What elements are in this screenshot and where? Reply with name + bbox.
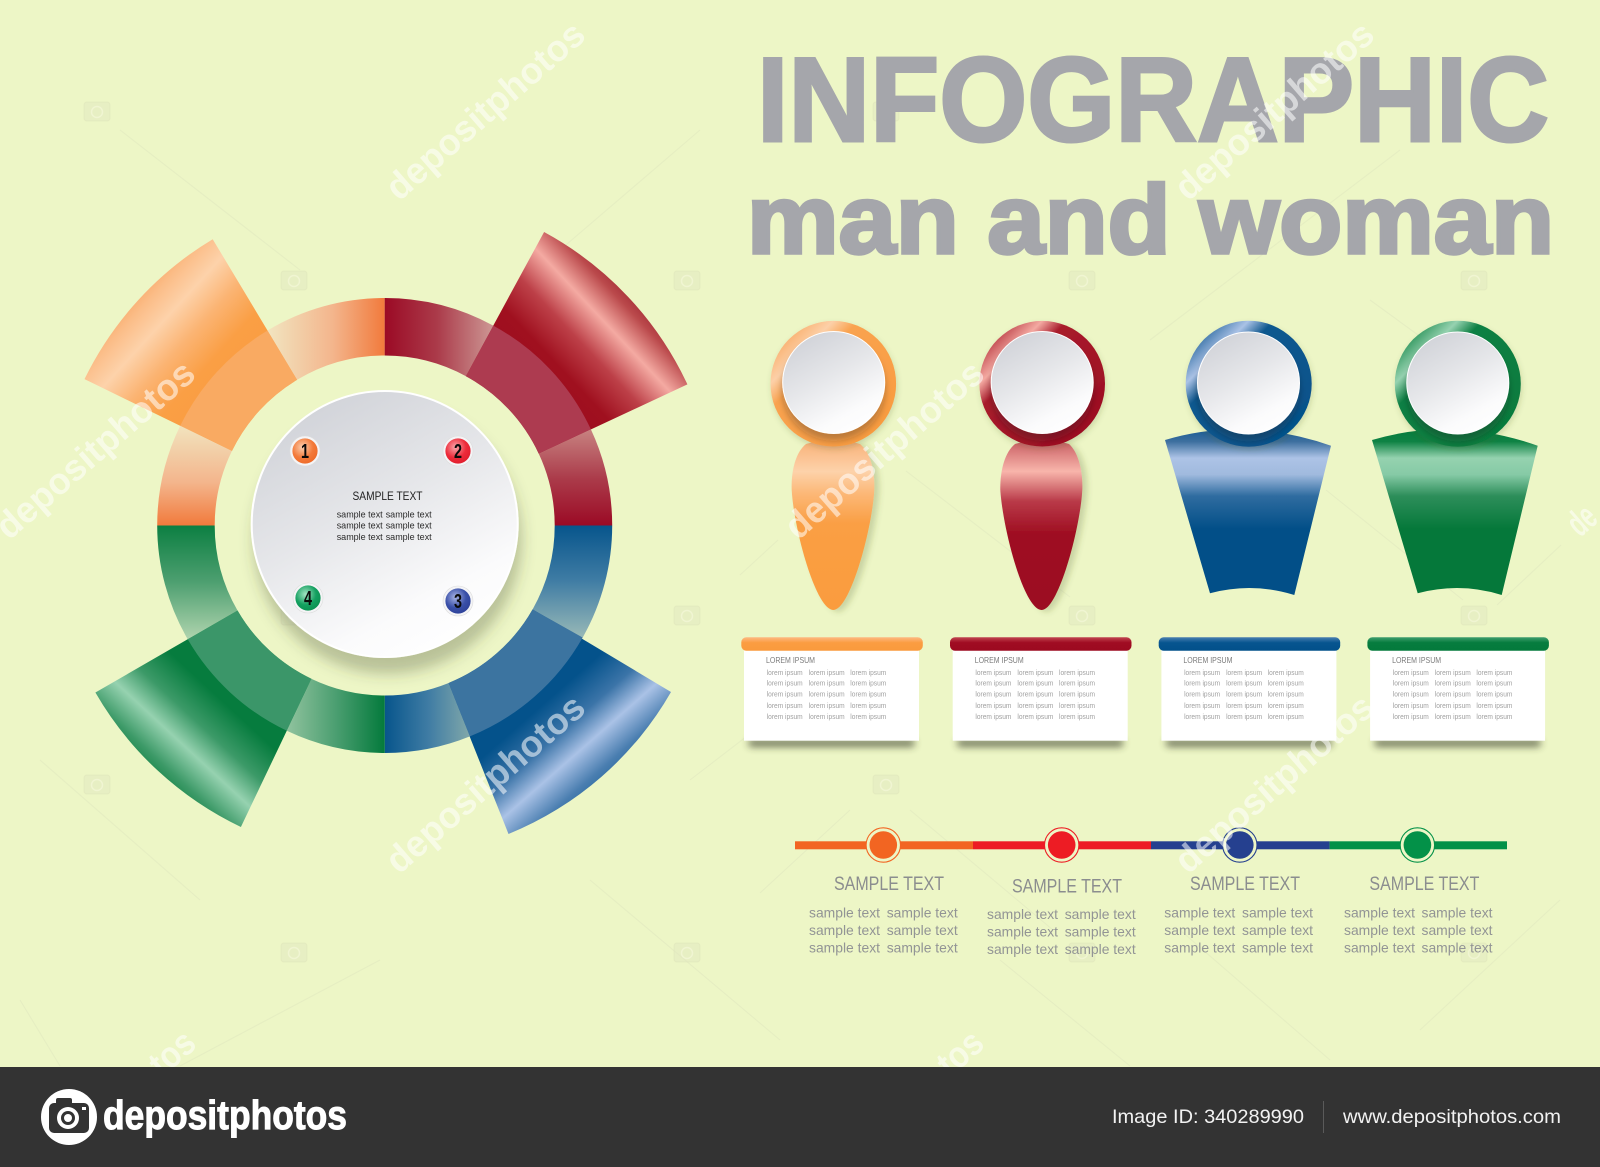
card: blue: LOREM IPSUM bbox=[1183, 656, 1233, 665]
watermark camera icons bbox=[84, 102, 1487, 962]
timeline text 3 bbox=[1164, 874, 1313, 955]
card: red bbox=[950, 637, 1132, 747]
timeline text 1: sample text bbox=[809, 939, 880, 955]
card: green: lorem ipsum bbox=[1435, 690, 1471, 698]
card: green: lorem ipsum bbox=[1435, 712, 1471, 721]
card: red: lorem ipsum bbox=[1017, 690, 1053, 698]
card: orange: LOREM IPSUM bbox=[766, 656, 815, 665]
title line 2: man and woman bbox=[747, 165, 1554, 274]
card: green: lorem ipsum bbox=[1393, 668, 1429, 677]
card: green: lorem ipsum bbox=[1476, 668, 1512, 677]
card: blue: lorem ipsum bbox=[1184, 690, 1220, 698]
sector: orange bbox=[84, 239, 297, 451]
ring: red quadrant bbox=[385, 298, 612, 526]
card: green: lorem ipsum bbox=[1393, 712, 1429, 721]
timeline text 4 bbox=[1344, 874, 1493, 955]
card: green: lorem ipsum bbox=[1435, 678, 1471, 688]
card: orange: lorem ipsum bbox=[809, 712, 845, 721]
card: orange: lorem ipsum bbox=[809, 678, 845, 688]
card: red: lorem ipsum bbox=[975, 712, 1011, 721]
badge 1 bbox=[290, 436, 320, 466]
timeline text 1: SAMPLE TEXT bbox=[834, 874, 944, 895]
radial diagram bbox=[84, 232, 687, 834]
card: orange bbox=[741, 637, 923, 747]
card: blue: lorem ipsum bbox=[1184, 678, 1220, 688]
sector: red bbox=[466, 232, 687, 454]
timeline bbox=[795, 828, 1507, 862]
card: blue: lorem ipsum bbox=[1226, 678, 1262, 688]
head ring bbox=[1186, 321, 1312, 447]
card: red: lorem ipsum bbox=[975, 668, 1011, 677]
centre text: sample text bbox=[386, 532, 432, 543]
card: orange: lorem ipsum bbox=[767, 668, 803, 677]
timeline text 1: sample text bbox=[887, 939, 958, 955]
card: red: lorem ipsum bbox=[1059, 701, 1095, 710]
head disc bbox=[1407, 332, 1509, 434]
watermark text: depositphotos bbox=[377, 13, 593, 208]
card: red: lorem ipsum bbox=[1017, 678, 1053, 688]
footer logo: depositphotos bbox=[103, 1092, 347, 1138]
card: red: lorem ipsum bbox=[1059, 678, 1095, 688]
node 3 bbox=[1223, 828, 1257, 862]
watermark text: tos bbox=[928, 1022, 991, 1084]
centre text: sample text bbox=[386, 509, 432, 520]
timeline text 1 bbox=[809, 874, 958, 955]
timeline text 4: sample text bbox=[1344, 904, 1415, 920]
timeline text 2: SAMPLE TEXT bbox=[1012, 876, 1122, 897]
figure: orange bbox=[770, 321, 896, 610]
badge 4 bbox=[293, 583, 323, 613]
badge 2 bbox=[443, 436, 473, 466]
watermark lines bbox=[20, 130, 1561, 1066]
card: blue: lorem ipsum bbox=[1184, 668, 1220, 677]
timeline text 2: sample text bbox=[1065, 941, 1136, 957]
card: blue: lorem ipsum bbox=[1226, 690, 1262, 698]
timeline text 2: sample text bbox=[1065, 906, 1136, 922]
card: blue: lorem ipsum bbox=[1268, 668, 1304, 677]
card: orange: lorem ipsum bbox=[850, 678, 886, 688]
timeline text 2: sample text bbox=[1065, 924, 1136, 940]
card: blue: lorem ipsum bbox=[1184, 701, 1220, 710]
watermark text: tos bbox=[140, 1022, 203, 1084]
card: blue bbox=[1159, 637, 1340, 747]
timeline text 1: sample text bbox=[887, 922, 958, 938]
card: orange: lorem ipsum bbox=[850, 668, 886, 677]
timeline text 3: sample text bbox=[1164, 904, 1235, 920]
card: red: lorem ipsum bbox=[1059, 690, 1095, 698]
timeline text 3: SAMPLE TEXT bbox=[1190, 874, 1300, 895]
card: red: lorem ipsum bbox=[1017, 712, 1053, 721]
ring: blue quadrant bbox=[385, 526, 612, 753]
card: green: lorem ipsum bbox=[1393, 678, 1429, 688]
timeline text 2: sample text bbox=[987, 941, 1058, 957]
timeline text 2: sample text bbox=[987, 906, 1058, 922]
head disc bbox=[991, 332, 1093, 434]
timeline text 2: sample text bbox=[987, 924, 1058, 940]
card: orange: lorem ipsum bbox=[767, 701, 803, 710]
timeline text 3: sample text bbox=[1242, 922, 1313, 938]
centre text: sample text bbox=[337, 509, 383, 520]
watermark text: depositphotos bbox=[377, 686, 593, 881]
card: orange: lorem ipsum bbox=[850, 690, 886, 698]
badge 4: 4 bbox=[304, 588, 313, 610]
timeline text 3: sample text bbox=[1242, 904, 1313, 920]
timeline text 4: sample text bbox=[1344, 939, 1415, 955]
sector: blue bbox=[448, 609, 671, 834]
card: blue: lorem ipsum bbox=[1184, 712, 1220, 721]
image id: Image ID: 340289990 bbox=[1112, 1106, 1304, 1128]
watermark text: depositphotos bbox=[1166, 13, 1382, 208]
body bbox=[1000, 440, 1082, 610]
card: blue: lorem ipsum bbox=[1268, 712, 1304, 721]
head ring bbox=[979, 321, 1105, 447]
card: green: lorem ipsum bbox=[1435, 668, 1471, 677]
footer logo bbox=[41, 1089, 347, 1145]
website: www.depositphotos.com bbox=[1342, 1106, 1561, 1128]
body bbox=[1165, 429, 1331, 595]
head ring bbox=[1395, 321, 1521, 447]
head disc bbox=[783, 332, 885, 434]
card: orange: lorem ipsum bbox=[850, 701, 886, 710]
node 1 bbox=[866, 828, 900, 862]
card: orange: lorem ipsum bbox=[767, 712, 803, 721]
card: green: lorem ipsum bbox=[1476, 701, 1512, 710]
card: green bbox=[1367, 637, 1549, 747]
card: blue: lorem ipsum bbox=[1268, 690, 1304, 698]
timeline text 2 bbox=[987, 876, 1136, 957]
card: blue: lorem ipsum bbox=[1226, 668, 1262, 677]
card: green: lorem ipsum bbox=[1476, 690, 1512, 698]
card: orange: lorem ipsum bbox=[809, 701, 845, 710]
figure: blue bbox=[1165, 321, 1331, 595]
card: green: lorem ipsum bbox=[1476, 678, 1512, 688]
node 4 bbox=[1400, 828, 1435, 862]
ring: green quadrant bbox=[157, 526, 385, 753]
centre text: sample text bbox=[337, 521, 383, 532]
title line 1: INFOGRAPHIC bbox=[757, 33, 1549, 167]
head disc bbox=[1198, 332, 1300, 434]
badge 3 bbox=[443, 586, 473, 616]
card: green: lorem ipsum bbox=[1435, 701, 1471, 710]
badge 3: 3 bbox=[454, 591, 462, 613]
body bbox=[1372, 429, 1538, 595]
timeline text 3: sample text bbox=[1242, 939, 1313, 955]
badge 1: 1 bbox=[301, 441, 309, 463]
sector: green bbox=[95, 610, 312, 827]
card: red: lorem ipsum bbox=[975, 678, 1011, 688]
card: orange: lorem ipsum bbox=[767, 678, 803, 688]
timeline text 1: sample text bbox=[809, 922, 880, 938]
card: red: lorem ipsum bbox=[1017, 668, 1053, 677]
card: blue: lorem ipsum bbox=[1268, 701, 1304, 710]
body bbox=[792, 440, 874, 610]
centre text: sample text bbox=[337, 532, 383, 543]
timeline text 3: sample text bbox=[1164, 922, 1235, 938]
card: green: lorem ipsum bbox=[1393, 690, 1429, 698]
badge 2: 2 bbox=[454, 441, 462, 463]
card: red: lorem ipsum bbox=[975, 690, 1011, 698]
card: blue: lorem ipsum bbox=[1226, 712, 1262, 721]
card: orange: lorem ipsum bbox=[767, 690, 803, 698]
watermark text: depositphotos bbox=[776, 352, 992, 547]
head ring bbox=[770, 321, 896, 447]
card: red: lorem ipsum bbox=[1059, 668, 1095, 677]
card: blue: lorem ipsum bbox=[1268, 678, 1304, 688]
node 2 bbox=[1044, 828, 1079, 862]
ring: orange quadrant bbox=[157, 298, 385, 526]
timeline text 3: sample text bbox=[1164, 939, 1235, 955]
timeline text 4: SAMPLE TEXT bbox=[1369, 874, 1480, 895]
card: orange: lorem ipsum bbox=[809, 668, 845, 677]
card: blue: lorem ipsum bbox=[1226, 701, 1262, 710]
footer bar bbox=[0, 1067, 1600, 1167]
card: orange: lorem ipsum bbox=[809, 690, 845, 698]
timeline text 4: sample text bbox=[1422, 939, 1493, 955]
watermark text: depositphotos bbox=[1166, 686, 1382, 881]
timeline text 4: sample text bbox=[1422, 904, 1493, 920]
card: green: lorem ipsum bbox=[1393, 701, 1429, 710]
centre disc bbox=[252, 391, 518, 657]
card: red: lorem ipsum bbox=[975, 701, 1011, 710]
centre heading: SAMPLE TEXT bbox=[352, 491, 422, 503]
card: red: lorem ipsum bbox=[1059, 712, 1095, 721]
card: green: lorem ipsum bbox=[1476, 712, 1512, 721]
figure: green bbox=[1372, 321, 1538, 595]
card: green: LOREM IPSUM bbox=[1392, 656, 1441, 665]
title bbox=[747, 33, 1554, 274]
timeline text 4: sample text bbox=[1344, 922, 1415, 938]
timeline text 1: sample text bbox=[887, 904, 958, 920]
card: red: lorem ipsum bbox=[1017, 701, 1053, 710]
timeline text 1: sample text bbox=[809, 904, 880, 920]
centre text: sample text bbox=[386, 521, 432, 532]
centre text bbox=[337, 509, 432, 543]
card: orange: lorem ipsum bbox=[850, 712, 886, 721]
figure: red bbox=[979, 321, 1105, 610]
card: red: LOREM IPSUM bbox=[975, 656, 1024, 665]
timeline text 4: sample text bbox=[1422, 922, 1493, 938]
